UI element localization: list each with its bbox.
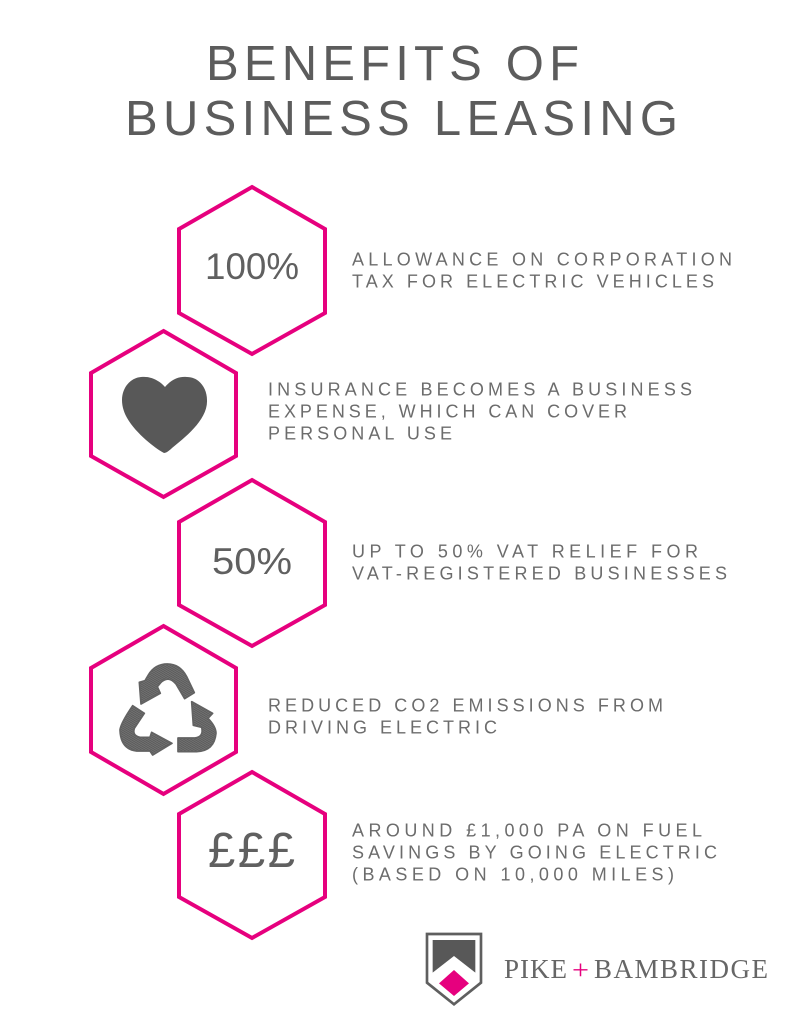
text: VAT relief [352, 542, 727, 584]
text: insurance: PERSONAL USE [268, 424, 452, 444]
panel: CO2 emissions [91, 626, 663, 794]
hexagon: 50% [179, 480, 325, 646]
text: VAT relief: UP TO 50% VAT RELIEF FOR [352, 542, 698, 562]
text: fuel savings: AROUND £1,000 PA ON FUEL [352, 820, 702, 840]
icon: recycle arrows [120, 664, 216, 755]
wordmark: BAMBRIDGE [594, 954, 768, 984]
text: corporation tax [352, 250, 732, 292]
text: insurance: EXPENSE, WHICH CAN COVER [268, 402, 627, 422]
hexagon: 100% [179, 187, 325, 354]
text: CO2 emissions [268, 696, 663, 738]
stat: 100%: 100% [205, 246, 299, 287]
panel: insurance [91, 331, 692, 497]
text: fuel savings [352, 820, 717, 884]
title: BUSINESS LEASING [125, 92, 678, 146]
wordmark: PIKE [504, 954, 567, 984]
text: fuel savings: (BASED ON 10,000 MILES) [352, 864, 674, 884]
text: CO2 emissions: REDUCED CO2 EMISSIONS FROM [268, 696, 663, 716]
icon: shield [426, 933, 482, 1006]
panel: fuel savings [179, 772, 717, 938]
text: insurance: INSURANCE BECOMES A BUSINESS [268, 380, 692, 400]
text: corporation tax: ALLOWANCE ON CORPORATION [352, 250, 732, 270]
hexagon: recycle [91, 626, 236, 794]
stat: pounds: £££ [208, 824, 295, 878]
panel: corporation tax allowance [179, 187, 732, 354]
wordmark [504, 954, 768, 985]
hexagon: pounds [179, 772, 325, 938]
title: BENEFITS OF [206, 37, 579, 91]
text: insurance [268, 380, 692, 444]
text: CO2 emissions: DRIVING ELECTRIC [268, 718, 497, 738]
panel: VAT relief [179, 480, 727, 646]
wordmark: + [572, 955, 589, 985]
logo: Pike + Bambridge [426, 933, 768, 1006]
text: fuel savings: SAVINGS BY GOING ELECTRIC [352, 842, 717, 862]
text: corporation tax: TAX FOR ELECTRIC VEHICLES [352, 272, 714, 292]
hexagon: heart [91, 331, 236, 497]
stat: 50%: 50% [212, 541, 292, 582]
icon: heart [122, 377, 207, 453]
text: VAT relief: VAT-REGISTERED BUSINESSES [352, 564, 727, 584]
title [125, 37, 678, 146]
